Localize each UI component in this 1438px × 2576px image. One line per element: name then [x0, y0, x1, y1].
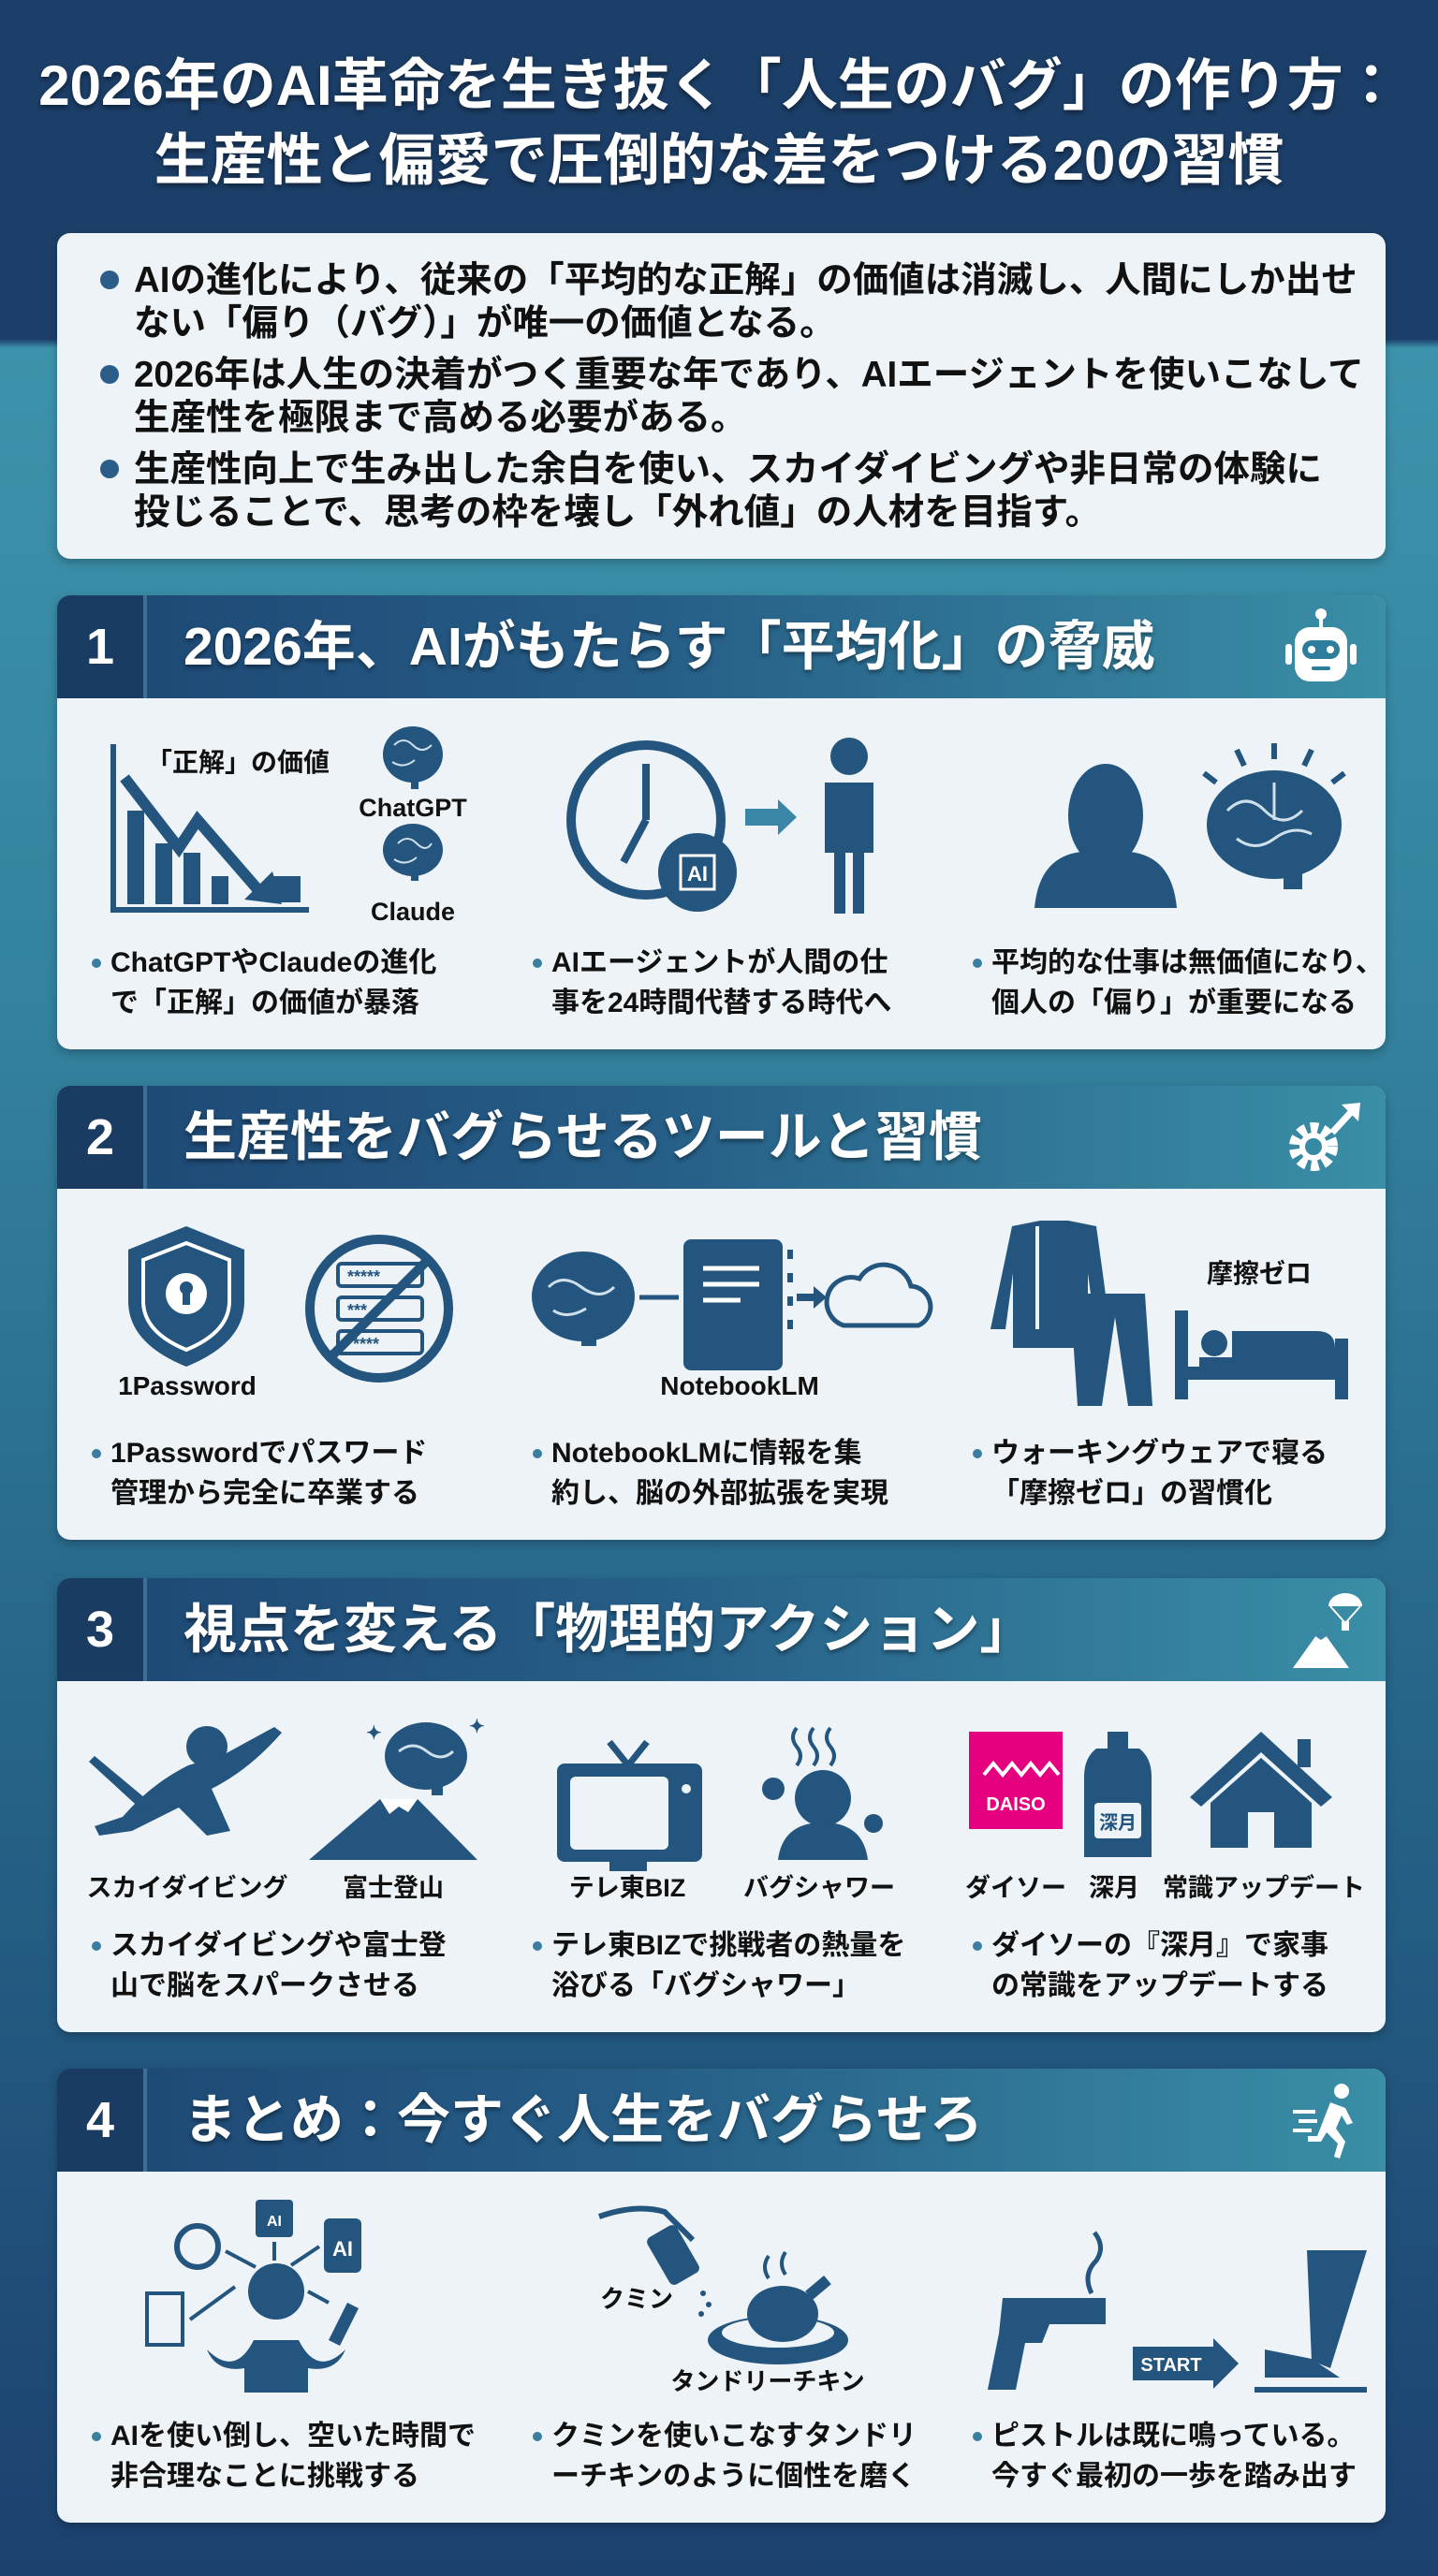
icon: bug shower person: バグシャワー [743, 1873, 895, 1902]
icons section 3 [87, 1717, 1365, 1902]
icon: cumin tandoori chicken: クミン [600, 2285, 673, 2313]
caption 2c: ウォーキングウェアで寝る [991, 1438, 1328, 1469]
caption 2c [973, 1433, 1413, 1514]
icon: no passwords: **** [353, 1335, 379, 1354]
summary bullet 2 [134, 354, 1386, 440]
icon: brain notebook cloud [532, 1239, 931, 1400]
icon: DAISO [965, 1732, 1066, 1902]
icon: falling value chart [110, 744, 330, 913]
icon: DAISO: ダイソー [965, 1873, 1066, 1902]
caption 4c: ピストルは既に鳴っている。 [991, 2421, 1356, 2452]
icon: gear with arrow [1289, 1103, 1360, 1171]
caption 1a: ChatGPTやClaudeの進化 [110, 947, 436, 978]
icon: robot [1285, 608, 1357, 681]
icon: leg stepping [1255, 2250, 1367, 2393]
icon: person with AI tools [147, 2200, 361, 2393]
icon: clock AI replacing human: AI [687, 862, 708, 886]
caption 3b [533, 1925, 973, 2006]
icon: house [1163, 1732, 1365, 1902]
title [38, 54, 1400, 192]
caption 2a: 管理から完全に卒業する [110, 1478, 419, 1509]
icon: detergent bottle [1084, 1732, 1152, 1902]
caption 4b: ーチキンのように個性を磨く [551, 2461, 916, 2492]
icon: no passwords [310, 1239, 448, 1378]
panel: section 3 [57, 1578, 1386, 2032]
caption 1c [973, 943, 1413, 1023]
icon: parachute mountain [1293, 1593, 1362, 1668]
icon: no passwords: ***** [347, 1267, 380, 1286]
caption 1a: で「正解」の価値が暴落 [110, 988, 419, 1018]
icon: person with AI tools: AI [267, 2214, 282, 2230]
icon: Mt Fuji brain [87, 1717, 485, 1902]
caption 2b: NotebookLMに情報を集 [551, 1438, 862, 1469]
icon: 1Password shield: 1Password [118, 1371, 257, 1400]
icon: house: 常識アップデート [1163, 1873, 1365, 1902]
caption 1a [92, 943, 532, 1023]
icon: TV [557, 1742, 702, 1902]
icon: person and brain [1034, 743, 1344, 908]
caption 1c: 個人の「偏り」が重要になる [991, 988, 1357, 1018]
caption 4a [92, 2416, 532, 2496]
header 3 [57, 1578, 1386, 1681]
header 1 [57, 595, 1386, 698]
icon: runner [1293, 2084, 1353, 2159]
summary bullet 2: 2026年は人生の決着がつく重要な年であり、AIエージェントを使いこなして [134, 355, 1364, 395]
summary bullet 3 [134, 448, 1386, 534]
summary bullet 1: ない「偏り（バグ）」が唯一の価値となる。 [134, 303, 836, 344]
icon: falling value chart: 「正解」の価値 [146, 748, 330, 777]
panel: section 1 [57, 595, 1386, 1049]
caption 1b: AIエージェントが人間の仕 [551, 947, 888, 978]
icons section 4 [145, 2200, 1367, 2395]
caption 3a: スカイダイビングや富士登 [110, 1930, 447, 1961]
title: 2026年のAI革命を生き抜く「人生のバグ」の作り方： [38, 54, 1400, 117]
caption 3c [973, 1925, 1413, 2006]
header 4 [57, 2069, 1386, 2172]
icon: Mt Fuji brain: 富士登山 [343, 1874, 444, 1902]
caption 4a: AIを使い倒し、空いた時間で [110, 2421, 476, 2452]
icon: cumin tandoori chicken: タンドリーチキン [670, 2367, 865, 2395]
caption 3a: 山で脳をスパークさせる [110, 1970, 419, 2001]
icon: no passwords: *** [347, 1301, 367, 1320]
icon: cumin tandoori chicken [599, 2208, 865, 2395]
header 2: 生産性をバグらせるツールと習慣 [183, 1107, 982, 1167]
caption 1b [533, 943, 973, 1023]
summary bullet 1: AIの進化により、従来の「平均的な正解」の価値は消滅し、人間にしか出せ [134, 260, 1357, 300]
icon: skydiver [89, 1726, 282, 1836]
header 3: 視点を変える「物理的アクション」 [183, 1600, 1033, 1660]
caption 2a: 1Passwordでパスワード [110, 1438, 427, 1469]
icon: brain notebook cloud: NotebookLM [660, 1371, 819, 1400]
caption 4a: 非合理なことに挑戦する [110, 2461, 419, 2492]
summary box [57, 233, 1386, 559]
icon: person with AI tools: AI [332, 2237, 353, 2261]
icon: 1Password shield [118, 1226, 257, 1400]
panel: section 2 [57, 1086, 1386, 1540]
icon: brains ChatGPT Claude: ChatGPT [359, 794, 467, 822]
icon: bug shower person [743, 1728, 895, 1902]
icons section 1 [110, 726, 1346, 926]
icons section 2 [118, 1221, 1348, 1406]
caption 3c: ダイソーの『深月』で家事 [991, 1930, 1328, 1961]
caption 3c: の常識をアップデートする [991, 1970, 1328, 2001]
caption 3b: テレ東BIZで挑戦者の熱量を [551, 1930, 905, 1961]
icon: detergent bottle: 深月 [1089, 1874, 1139, 1902]
caption 1b: 事を24時間代替する時代へ [551, 988, 891, 1018]
caption 2b: 約し、脳の外部拡張を実現 [551, 1478, 888, 1509]
icon: brains ChatGPT Claude [359, 726, 467, 926]
caption 2b [533, 1433, 973, 1514]
caption 2c: 「摩擦ゼロ」の習慣化 [991, 1478, 1272, 1509]
icon: pistol START: START [1140, 2355, 1202, 2376]
icon: walking wear [990, 1221, 1152, 1406]
summary bullet 3: 投じることで、思考の枠を壊し「外れ値」の人材を目指す。 [134, 492, 1101, 533]
icon: brains ChatGPT Claude: Claude [371, 898, 455, 926]
icon: clock AI replacing human [571, 738, 873, 914]
header 3: 3 [86, 1602, 114, 1658]
caption 4b: クミンを使いこなすタンドリ [551, 2421, 917, 2452]
icon: pistol START [988, 2232, 1239, 2390]
header 1: 2026年、AIがもたらす「平均化」の脅威 [183, 617, 1155, 677]
header 2 [57, 1086, 1386, 1189]
caption 4c [973, 2416, 1413, 2496]
icon: Mt Fuji brain: ✦ [366, 1723, 382, 1744]
summary bullet 2: 生産性を極限まで高める必要がある。 [134, 398, 747, 438]
icon: detergent bottle: 深月 [1099, 1812, 1137, 1834]
icon: bed zero friction: 摩擦ゼロ [1207, 1259, 1312, 1288]
summary bullet 3: 生産性向上で生み出した余白を使い、スカイダイビングや非日常の体験に [134, 449, 1322, 490]
caption 3a [92, 1925, 532, 2006]
header 4: まとめ：今すぐ人生をバグらせろ [183, 2090, 983, 2150]
icon: DAISO: DAISO [986, 1794, 1046, 1815]
caption 4b [533, 2416, 973, 2496]
icon: TV: テレ東BIZ [569, 1874, 685, 1902]
caption 3b: 浴びる「バグシャワー」 [551, 1970, 860, 2001]
caption 2a [92, 1433, 532, 1514]
panel: section 4 [57, 2069, 1386, 2523]
icon: Mt Fuji brain: スカイダイビング [87, 1873, 287, 1902]
title: 生産性と偏愛で圧倒的な差をつける20の習慣 [154, 129, 1284, 192]
icon: bed zero friction [1175, 1259, 1348, 1399]
header 2: 2 [86, 1109, 114, 1165]
summary bullet 1 [134, 259, 1386, 345]
header 4: 4 [86, 2092, 114, 2148]
caption 4c: 今すぐ最初の一歩を踏み出す [991, 2461, 1357, 2492]
header 1: 1 [86, 619, 114, 675]
icon: Mt Fuji brain: ✦ [469, 1717, 485, 1737]
caption 1c: 平均的な仕事は無価値になり、 [991, 947, 1384, 978]
